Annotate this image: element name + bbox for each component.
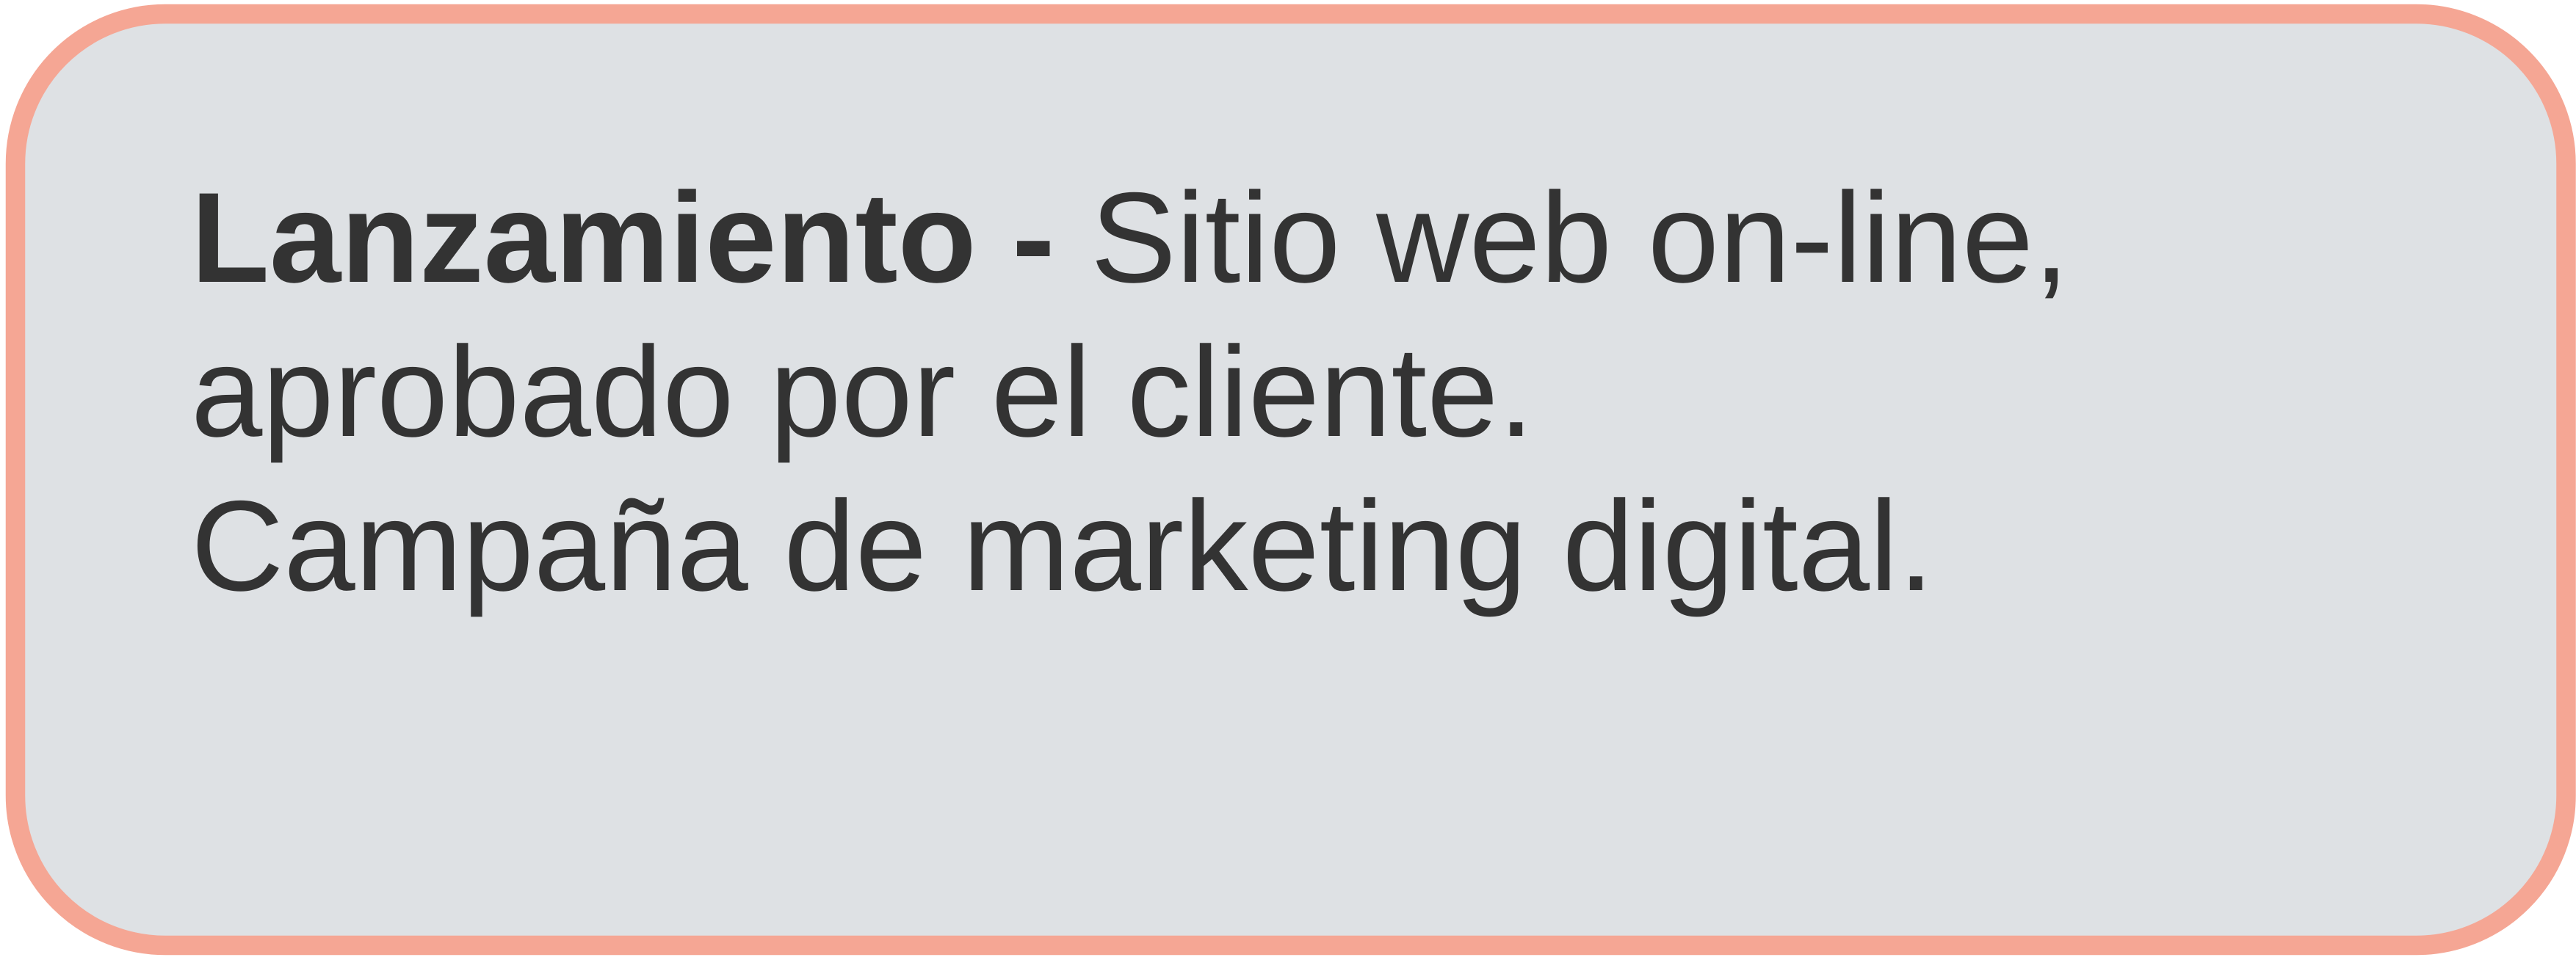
- text block: launch description: aprobado por el cliente.: [191, 321, 1534, 464]
- text block: launch description: Campaña de marketing digital.: [191, 475, 1934, 618]
- text block: launch description: Lanzamiento - Sitio web on-line,: [191, 167, 2069, 310]
- text block: launch description: [191, 167, 2069, 618]
